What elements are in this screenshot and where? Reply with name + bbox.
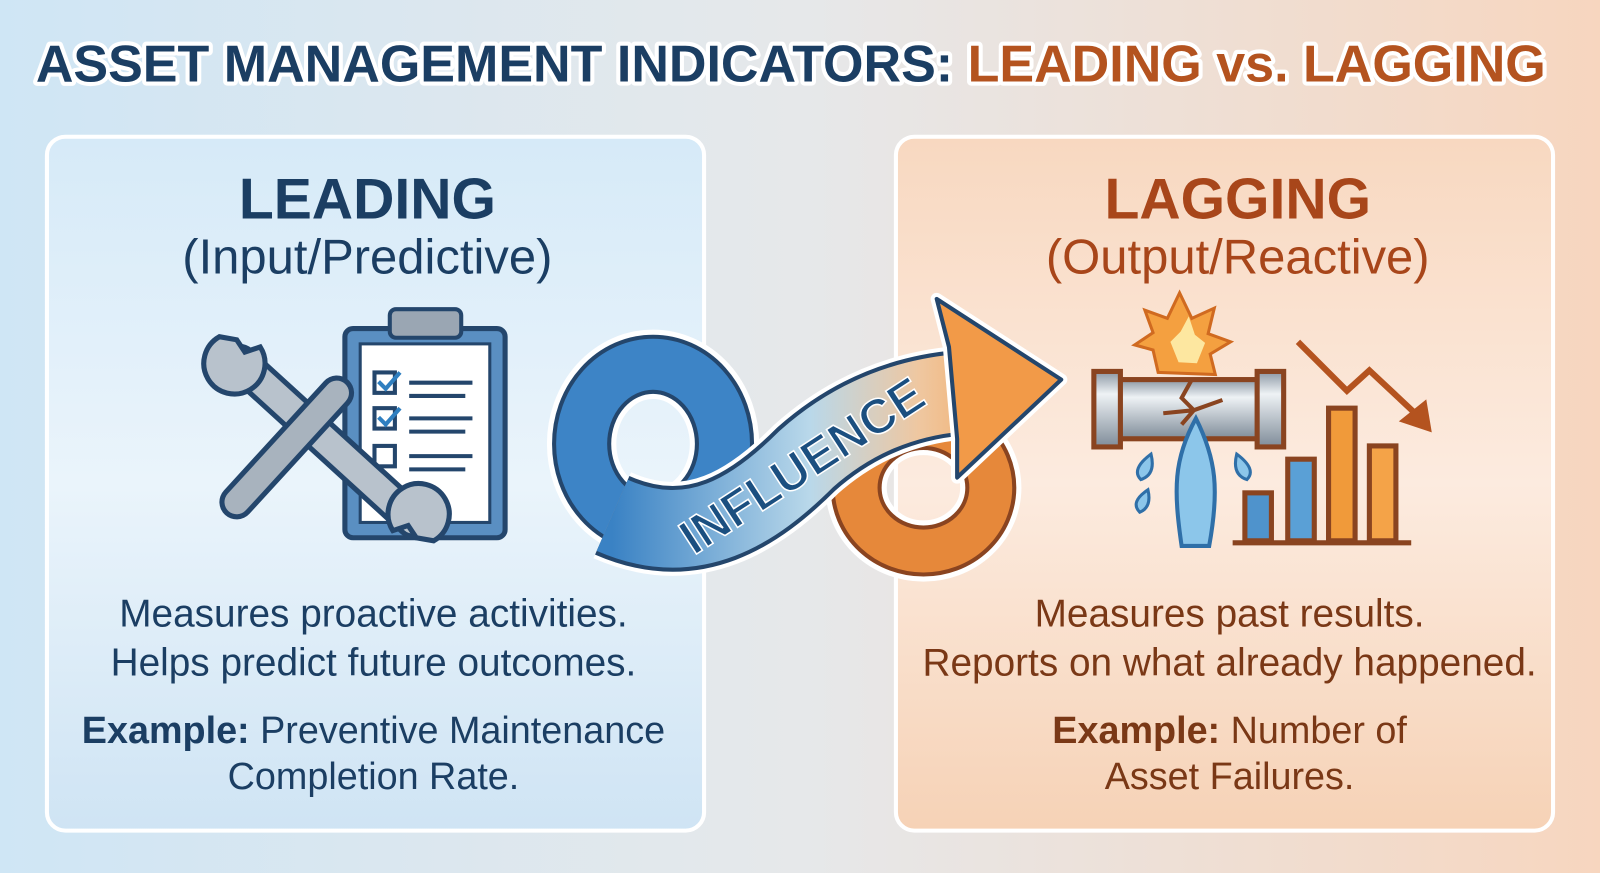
icon: wrench and clipboard (204, 309, 505, 541)
heading: lagging: LAGGING (1104, 167, 1371, 231)
chart: declining bars (1233, 342, 1429, 543)
panel: leading (47, 137, 704, 831)
panel: leading: Helps predict future outcomes. (111, 642, 636, 685)
subheading: lagging: (Output/Reactive) (1046, 230, 1430, 284)
title: ASSET MANAGEMENT INDICATORS: LEADING vs. LAGGING (36, 36, 1546, 94)
panel: lagging (896, 137, 1553, 831)
title: ASSET MANAGEMENT INDICATORS: LEADING vs. LAGGING (36, 36, 1546, 94)
text: lagging example: Example: Number of (1052, 709, 1407, 751)
arrow: influence infinity (582, 299, 1061, 565)
panel: lagging: Asset Failures. (1105, 755, 1354, 797)
panel: lagging: Reports on what already happened. (922, 642, 1537, 685)
text: leading example: Example: Preventive Maintenance (82, 709, 665, 751)
label: influence: INFLUENCE (670, 367, 935, 565)
heading: leading: LEADING (239, 167, 496, 231)
text: lagging description: Measures past results. (1035, 593, 1425, 636)
icon: burst pipe (1094, 293, 1284, 546)
panel: leading: Completion Rate. (228, 755, 519, 797)
text: leading description: Measures proactive activities. (119, 593, 628, 636)
subheading: leading: (Input/Predictive) (182, 230, 552, 284)
